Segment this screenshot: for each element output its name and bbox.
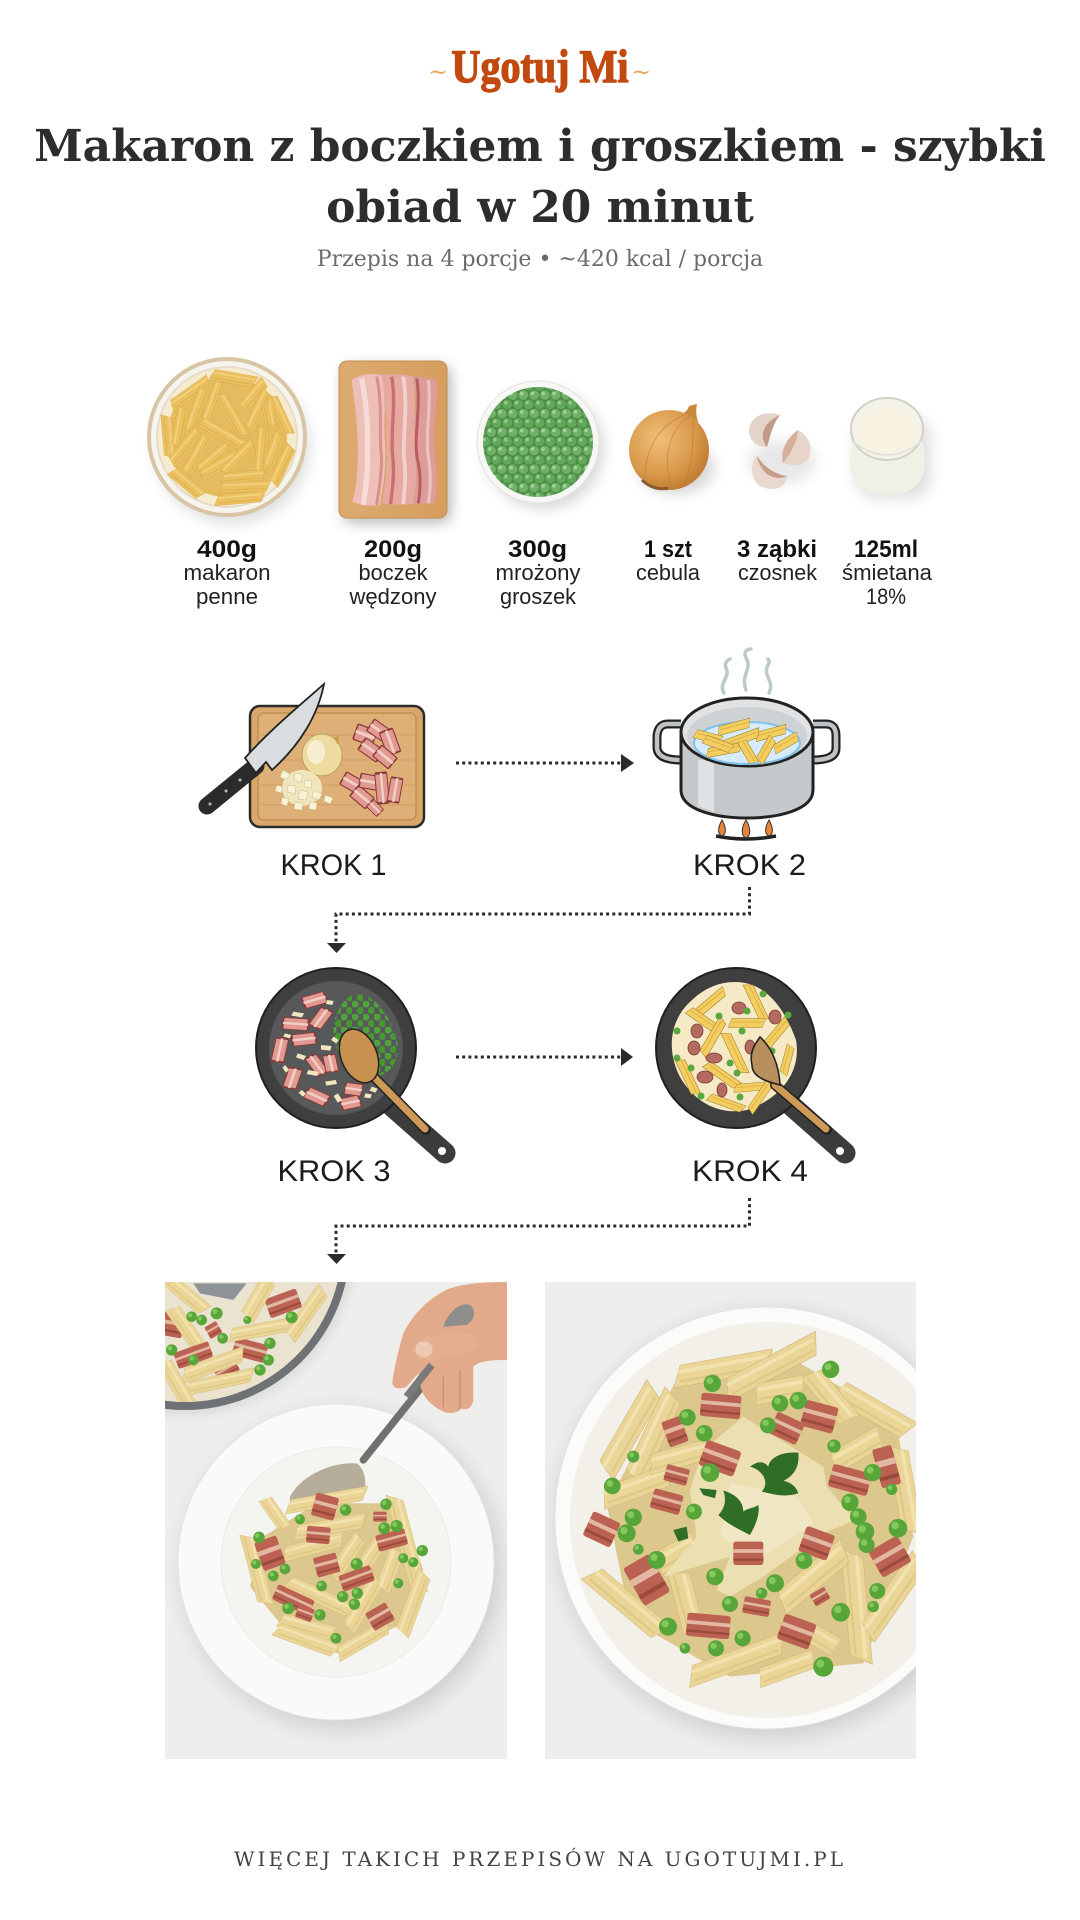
logo left flourish: ~ <box>428 58 448 86</box>
spoon bowl and handle <box>290 1385 422 1502</box>
panel: steps flow <box>207 649 845 1264</box>
pasta with bacon and peas <box>581 1331 930 1688</box>
logo right flourish: ~ <box>631 58 651 86</box>
ingredient: cream jar <box>850 398 931 499</box>
ingredient: bacon on board <box>339 361 451 523</box>
label: 300g mrożony groszek: groszek <box>500 584 577 609</box>
subtitle: Przepis na 4 porcje • ~420 kcal / porcja <box>317 247 763 272</box>
ingredient: peas bowl <box>477 381 604 509</box>
label: 1 szt cebula <box>636 536 701 585</box>
panel: serving photo <box>165 1282 507 1759</box>
arrow: step 2 to step 3 <box>327 887 750 953</box>
label: 125ml śmietana 18%: 18% <box>866 584 906 609</box>
label: 200g boczek wędzony: wędzony <box>348 584 436 609</box>
arrow: step 1 to step 2 <box>456 754 634 772</box>
label: 125ml śmietana 18%: śmietana <box>842 560 933 585</box>
panel: ingredients <box>149 359 933 609</box>
logo wordmark: Ugotuj Mi <box>452 41 628 93</box>
ingredient: onion <box>629 404 714 494</box>
hand holding spoon <box>392 1282 508 1413</box>
icon: step 4 pan with finished pasta <box>656 968 845 1155</box>
icon: step 3 pan with bacon and peas <box>256 968 446 1155</box>
label: 200g boczek wędzony <box>348 536 436 609</box>
label: 3 ząbki czosnek <box>737 536 818 585</box>
label: 300g mrożony groszek <box>496 536 580 609</box>
label: KROK 3: KROK 3 <box>278 1155 390 1188</box>
arrow: step 3 to step 4 <box>456 1048 633 1066</box>
label: 3 ząbki czosnek: 3 ząbki <box>737 536 817 563</box>
pasta on plate <box>240 1486 432 1662</box>
label: 200g boczek wędzony: 200g <box>364 536 422 563</box>
label: KROK 2: KROK 2 <box>693 849 806 882</box>
label: 200g boczek wędzony: boczek <box>358 560 428 585</box>
title <box>34 121 1046 233</box>
icon: step 1 cutting board with knife <box>207 684 424 827</box>
label: 300g mrożony groszek: 300g <box>508 536 567 563</box>
ingredient: penne bowl <box>149 359 310 524</box>
label: 125ml śmietana 18%: 125ml <box>854 536 918 563</box>
title: obiad w 20 minut <box>326 182 755 233</box>
icon: step 2 boiling pot <box>657 649 836 839</box>
label: KROK 1: KROK 1 <box>280 849 386 882</box>
panel: finished dish photo <box>545 1282 916 1759</box>
title: Makaron z boczkiem i groszkiem - szybki <box>34 121 1046 172</box>
label: 400g makaron penne: makaron <box>184 560 270 585</box>
white bowl <box>550 1305 916 1745</box>
frying pan with pasta <box>165 1282 352 1416</box>
label: 1 szt cebula: cebula <box>636 560 701 585</box>
label: 3 ząbki czosnek: czosnek <box>738 560 818 585</box>
label: 400g makaron penne: penne <box>196 584 258 609</box>
label: 125ml śmietana 18% <box>842 536 933 609</box>
ingredient: garlic cloves <box>748 413 816 489</box>
white plate <box>178 1404 500 1728</box>
parsley leaves <box>673 1453 799 1542</box>
label: KROK 4: KROK 4 <box>692 1155 808 1188</box>
label: 300g mrożony groszek: mrożony <box>496 560 580 585</box>
arrow: step 4 to photos <box>327 1198 750 1264</box>
label: 400g makaron penne <box>184 536 270 609</box>
label: 1 szt cebula: 1 szt <box>644 536 692 563</box>
logo <box>428 41 651 93</box>
footer: WIĘCEJ TAKICH PRZEPISÓW NA UGOTUJMI.PL <box>234 1846 846 1871</box>
label: 400g makaron penne: 400g <box>197 536 257 563</box>
